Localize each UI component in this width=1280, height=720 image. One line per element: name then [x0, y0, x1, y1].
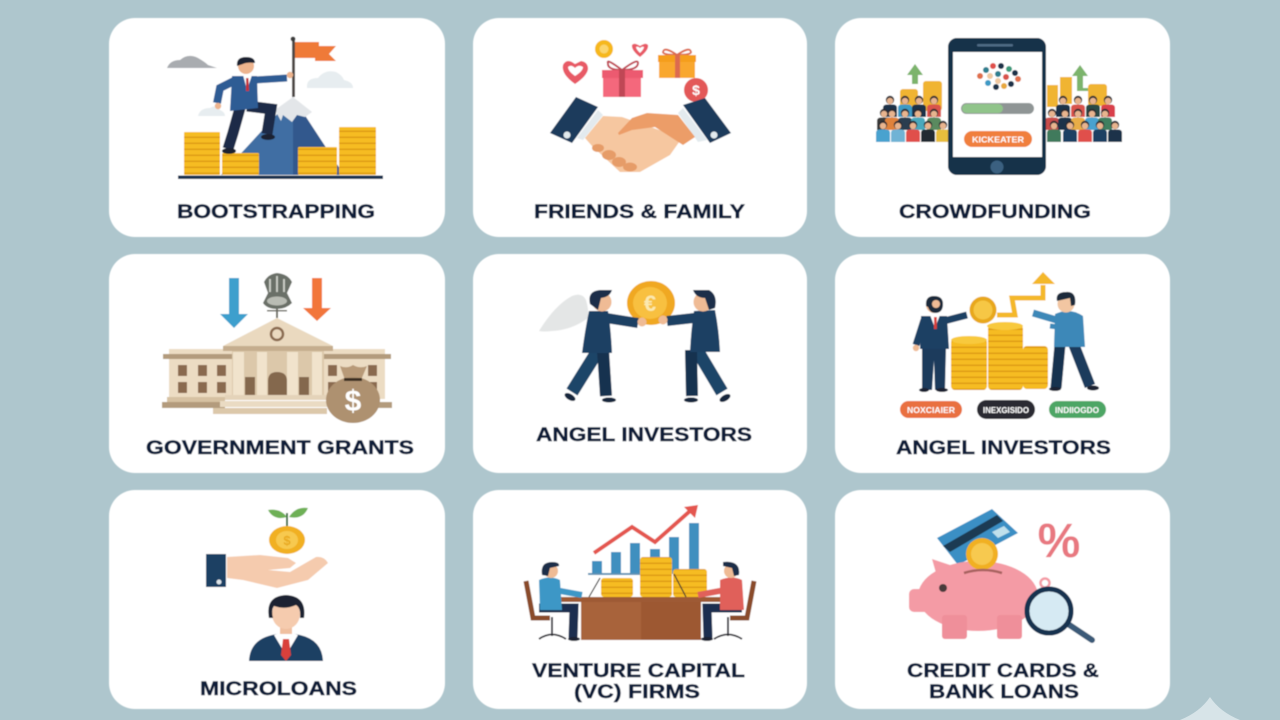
label: CROWDFUNDING	[899, 202, 1091, 223]
panel: bootstrapping	[109, 18, 445, 237]
label: MICROLOANS	[200, 679, 357, 700]
pills: INDIIOGDO	[1055, 405, 1099, 415]
label: VENTURE CAPITAL	[532, 661, 745, 682]
credit card	[937, 509, 1018, 565]
icon: money bag	[326, 365, 380, 423]
label	[907, 661, 1099, 703]
label: CREDIT CARDS &	[907, 661, 1099, 682]
right investor	[1033, 292, 1099, 391]
crowd right	[1045, 96, 1122, 142]
icon: climber on mountain with coins	[167, 37, 383, 179]
pills	[900, 400, 1106, 419]
icon: two investors holding coin	[539, 281, 732, 404]
icon: piggy bank, credit card and magnifier	[909, 509, 1092, 640]
label: ANGEL INVESTORS	[536, 425, 752, 446]
panel: angel investors with platforms	[835, 254, 1170, 473]
crowd left	[876, 96, 950, 142]
icon: hand, seedling coin and borrower	[206, 508, 328, 661]
icon: magnifier	[1027, 589, 1092, 640]
progress bar	[961, 103, 1034, 114]
icon: handshake with gifts	[550, 40, 731, 172]
panel: government grants	[109, 254, 445, 473]
arrow: blue down	[220, 278, 248, 328]
icon: government building	[162, 273, 392, 423]
button	[964, 131, 1032, 147]
label	[532, 661, 745, 703]
icon: handshake with gifts: $	[692, 82, 700, 98]
label: ANGEL INVESTORS	[896, 438, 1111, 459]
panel: angel investors with wing	[473, 254, 807, 473]
bar chart	[588, 523, 699, 575]
icon: borrower	[249, 595, 323, 661]
panel: venture capital	[473, 490, 807, 709]
icon: emblem	[263, 273, 292, 318]
arrow: orange down	[303, 278, 331, 321]
label: BOOTSTRAPPING	[177, 202, 375, 223]
icon: meeting table with chart	[526, 505, 754, 641]
panel: credit cards and bank loans	[835, 490, 1170, 709]
arrow: rising gold	[997, 272, 1055, 315]
icon: crowd inside phone	[977, 63, 1021, 90]
arrow: red trend	[594, 505, 698, 553]
pills: INEXGISIDO	[983, 405, 1029, 415]
right person	[698, 562, 754, 641]
label: (VC) FIRMS	[574, 682, 700, 703]
pills: NOXCIAIER	[907, 405, 955, 415]
label: GOVERNMENT GRANTS	[146, 438, 414, 459]
decorative peak bottom right	[1180, 697, 1240, 720]
percent sign: %	[1038, 515, 1080, 568]
left investor	[913, 296, 967, 392]
panel: microloans	[109, 490, 445, 709]
label: BANK LOANS	[929, 682, 1079, 703]
button: KICKEATER	[972, 134, 1024, 144]
icon: crowd and phone	[876, 38, 1122, 175]
icon: hand, seedling coin and borrower: $	[283, 533, 291, 548]
icon: investors with coin stacks and arrow	[900, 272, 1106, 419]
left person	[526, 562, 582, 641]
icon: money bag: $	[345, 385, 362, 418]
coin	[627, 281, 675, 325]
panel: crowdfunding	[835, 18, 1170, 237]
label: FRIENDS & FAMILY	[534, 202, 745, 223]
coin: €	[644, 291, 656, 316]
panel: friends and family	[473, 18, 807, 237]
